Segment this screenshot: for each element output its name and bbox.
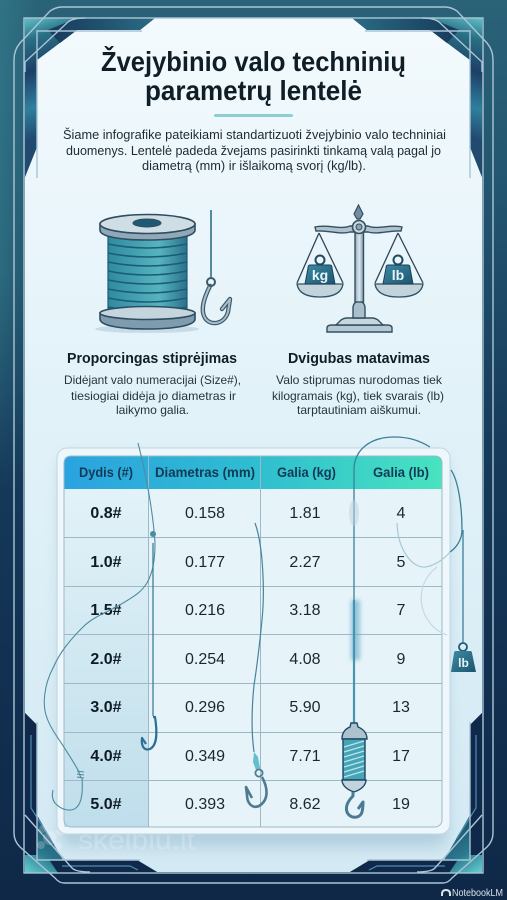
spool bottom flange xyxy=(100,306,195,329)
frame corner: top left xyxy=(25,18,155,177)
feature text: proportional strengthening: Didėjant valo numeracijai (Size#), xyxy=(64,373,241,387)
diameter column: 0.349 xyxy=(185,748,225,765)
strength lb column xyxy=(392,505,410,813)
frame corner: bottom left xyxy=(25,713,157,873)
title: Žvejybinio valo techninių xyxy=(101,46,406,77)
scale base xyxy=(327,301,392,332)
feature text: proportional strengthening: tiesiogiai didėja jo diametras ir xyxy=(71,389,236,403)
strength lb column: 4 xyxy=(397,505,406,522)
strength lb column: 9 xyxy=(397,651,406,668)
strength kg column: 1.81 xyxy=(289,505,321,522)
title: parametrų lentelė xyxy=(145,75,362,106)
title xyxy=(101,46,406,106)
table card xyxy=(57,448,450,834)
table header: Galia (kg) xyxy=(277,465,336,480)
strength lb column: 5 xyxy=(397,554,406,571)
feature text: dual measurement: Dvigubas matavimas xyxy=(288,350,430,367)
hook xyxy=(203,278,230,323)
diameter column: 0.393 xyxy=(185,796,225,813)
size column: 0.8# xyxy=(90,505,122,522)
title underline xyxy=(214,114,293,117)
weight: kg: kg xyxy=(312,267,328,283)
table header: Galia (lb) xyxy=(373,465,429,480)
frame corner: bottom right xyxy=(350,713,482,873)
strength lb column: 19 xyxy=(392,796,410,813)
table header: Dydis (#) xyxy=(79,465,133,480)
right pan xyxy=(375,233,423,297)
fishing line with hook, second xyxy=(142,531,156,749)
table header xyxy=(64,456,442,489)
strength lb column: 13 xyxy=(392,699,410,716)
diameter column: 0.216 xyxy=(185,602,225,619)
size column: 1.0# xyxy=(90,554,122,571)
strength kg column xyxy=(289,505,321,813)
strength kg column: 8.62 xyxy=(289,796,321,813)
strength lb column: 17 xyxy=(392,748,410,765)
table header: Diametras (mm) xyxy=(155,465,255,480)
feature text: dual measurement: tarptautiniam aiškumui. xyxy=(297,403,421,417)
icon: spool and hook xyxy=(95,210,230,333)
intro text xyxy=(63,127,446,173)
strength kg column: 3.18 xyxy=(289,602,321,619)
feature text: proportional strengthening: Proporcingas stiprėjimas xyxy=(67,350,237,367)
size column: 1.5# xyxy=(90,602,122,619)
frame corner: top right xyxy=(352,18,482,177)
intro text: diametrą (mm) ir išlaikomą svorį (kg/lb). xyxy=(142,158,366,173)
size column: 4.0# xyxy=(90,748,122,765)
strength kg column: 4.08 xyxy=(289,651,321,668)
scale pillar xyxy=(355,232,364,302)
intro text: Šiame infografike pateikiami standartizuoti žvejybinio valo techniniai xyxy=(63,127,446,142)
table card shadow xyxy=(60,455,448,847)
size column: 3.0# xyxy=(90,699,122,716)
feature text: dual measurement: Valo stiprumas nurodomas tiek xyxy=(276,373,443,387)
size column: 5.0# xyxy=(90,796,122,813)
weight: lb: lb xyxy=(392,267,404,283)
lb weight on line xyxy=(451,530,476,672)
left pan xyxy=(297,233,343,297)
diameter column: 0.158 xyxy=(185,505,225,522)
fishing line with hook, third xyxy=(246,523,267,807)
intro text: duomenys. Lentelė padeda žvejams pasirinkti tinkamą valą pagal jo xyxy=(66,143,441,158)
spool top flange xyxy=(100,214,195,240)
icon: balance scale xyxy=(297,205,423,332)
feature text: dual measurement xyxy=(272,350,444,417)
watermark xyxy=(37,825,196,855)
diameter column: 0.254 xyxy=(185,651,225,668)
hook line xyxy=(210,210,212,277)
size column: 2.0# xyxy=(90,651,122,668)
diameter column: 0.296 xyxy=(185,699,225,716)
background xyxy=(0,0,507,522)
lb weight on line: lb xyxy=(458,656,469,670)
size column xyxy=(90,505,122,813)
line loop, right xyxy=(349,437,462,722)
spring scale on line xyxy=(342,600,367,817)
feature text: proportional strengthening: laikymo galia. xyxy=(116,403,189,417)
watermark: skelbiu.lt xyxy=(78,825,196,855)
scale beam xyxy=(315,205,402,234)
strength kg column: 7.71 xyxy=(289,748,321,765)
strength lb column: 7 xyxy=(397,602,406,619)
feature text: dual measurement: kilogramais (kg), tiek svarais (lb) xyxy=(272,389,444,403)
strength kg column: 5.90 xyxy=(289,699,321,716)
spool thread xyxy=(108,232,187,317)
feature text: proportional strengthening xyxy=(64,350,241,417)
strength kg column: 2.27 xyxy=(289,554,321,571)
panel: data table xyxy=(57,448,450,834)
diameter column: 0.177 xyxy=(185,554,225,571)
fishing line with hook, left xyxy=(44,443,155,810)
diameter column xyxy=(185,505,225,813)
